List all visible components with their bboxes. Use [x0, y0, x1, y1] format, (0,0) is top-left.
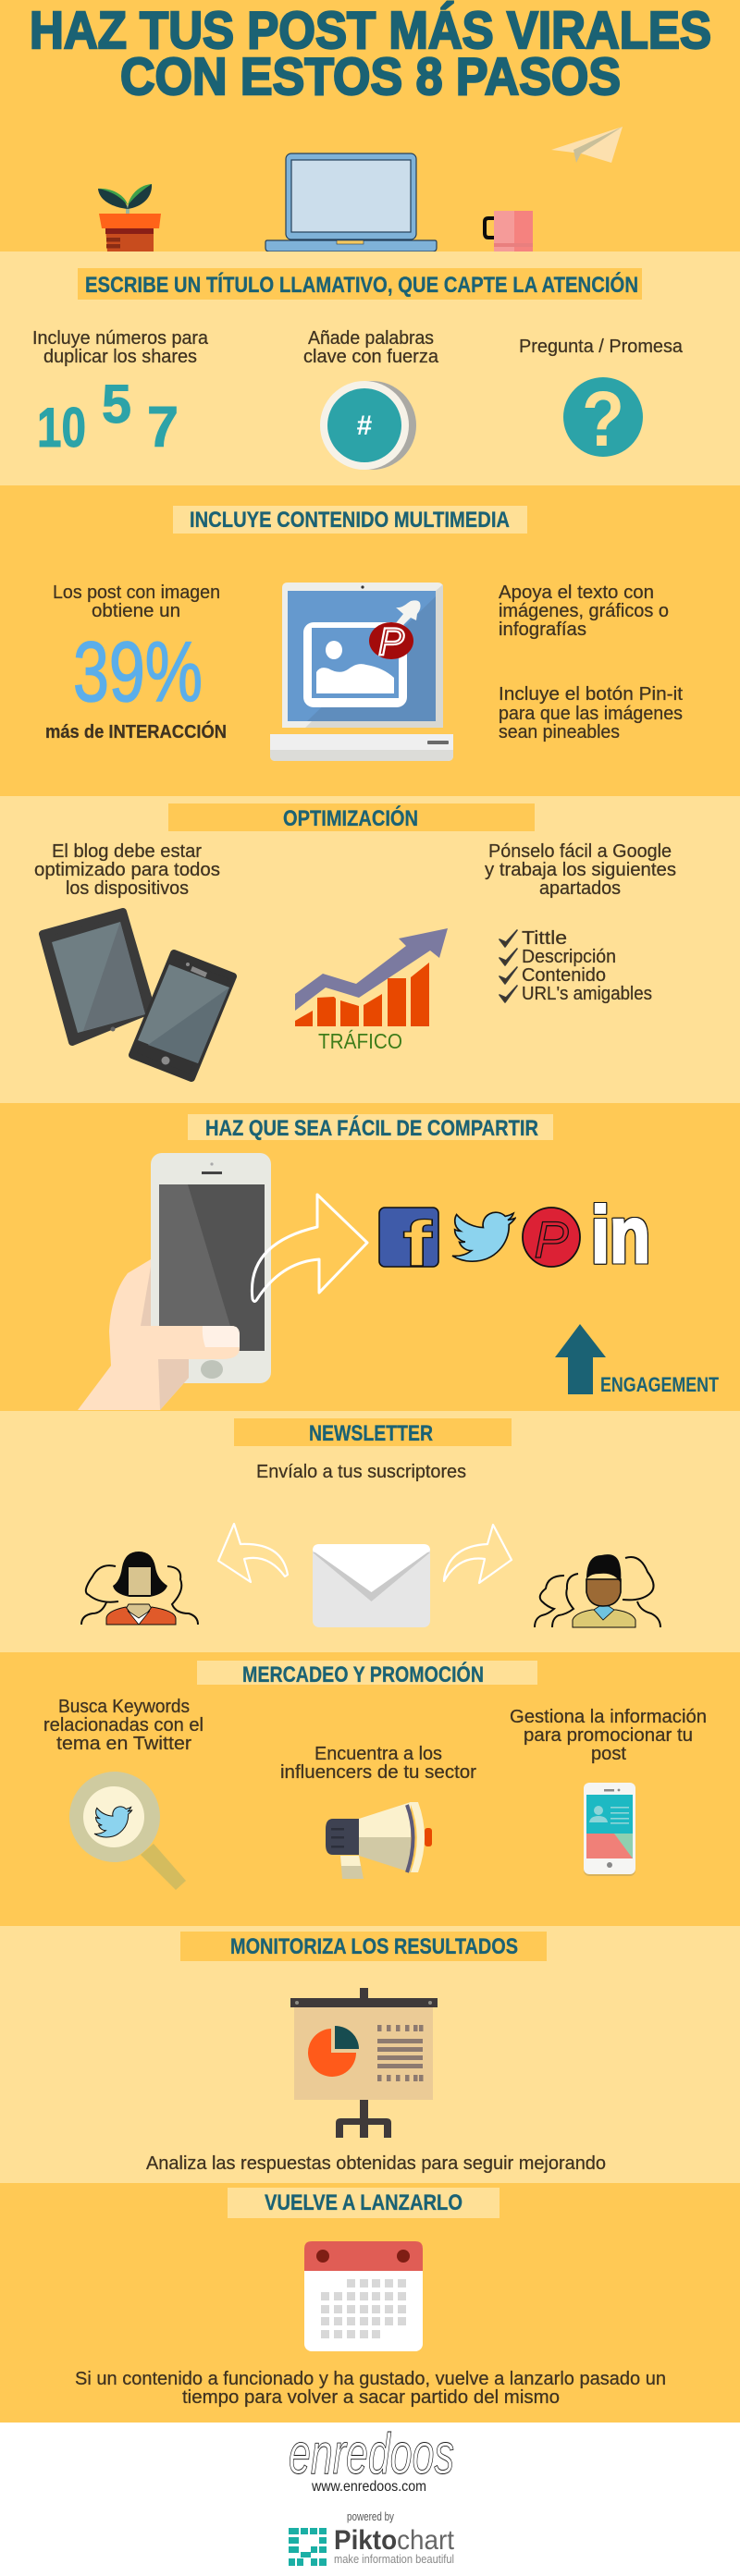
text: google: y trabaja los siguientes: [485, 860, 676, 880]
logo: piktochart: Piktochart: [334, 2525, 455, 2556]
panel: título llamativo: [0, 251, 740, 485]
checklist: Contenido: [522, 965, 606, 986]
panel: vuelve a lanzarlo: [0, 2183, 740, 2423]
text: números: duplicar los shares: [43, 347, 197, 367]
text: si un contenido: [75, 2369, 666, 2408]
icon: envelope: [313, 1544, 430, 1627]
checklist: Descripción: [522, 947, 616, 967]
icon: plant pot: [98, 184, 161, 251]
text: gestiona: Gestiona la información: [510, 1707, 707, 1727]
text: más de interacción: más de INTERACCIÓN: [45, 720, 227, 742]
icon: megaphone: [326, 1802, 432, 1879]
text: google: apartados: [539, 878, 621, 899]
text: pregunta: Pregunta / Promesa: [519, 337, 684, 357]
arrow: engagement up: [555, 1324, 606, 1394]
title: [30, 1, 711, 106]
text: analiza: Analiza las respuestas obtenidas para seguir mejorando: [146, 2153, 606, 2174]
icon: laptop with image and pin: [270, 583, 453, 761]
numbers: 10 5 7: [37, 374, 179, 460]
icon: smartphone profile: [584, 1783, 635, 1876]
icon: paper plane: [551, 127, 623, 163]
logo: enredoos: www.enredoos.com: [311, 2479, 426, 2495]
heading: MERCADEO Y PROMOCIÓN: [242, 1662, 484, 1687]
icon: presentation board: [290, 1988, 438, 2138]
text: botón pin-it: Incluye el botón Pin-it: [499, 684, 683, 705]
text: botón pin-it: [499, 684, 683, 742]
icon: twitter: [452, 1212, 515, 1261]
icon: facebook: [379, 1208, 438, 1280]
numbers: 10 5 7: 7: [147, 396, 179, 460]
heading: VUELVE A LANZARLO: [265, 2190, 462, 2215]
icon: laptop with image and pin: P: [378, 619, 404, 663]
icon: linkedin: in: [591, 1191, 650, 1280]
heading: INCLUYE CONTENIDO MULTIMEDIA: [190, 508, 510, 533]
icon: calendar: [304, 2241, 423, 2351]
panel: footer: [0, 2423, 740, 2576]
text: los post con imagen: Los post con imagen: [53, 583, 220, 603]
text: los post con imagen: obtiene un: [92, 601, 180, 621]
text: blog optimizado: El blog debe estar: [52, 841, 202, 862]
panel: mercadeo y promoción: [0, 1652, 740, 1926]
text: blog optimizado: los dispositivos: [66, 878, 189, 899]
icon: tablet and phone: [43, 912, 233, 1078]
icon: woman audience: [81, 1552, 198, 1625]
arrow: to social networks: [252, 1195, 367, 1302]
text: si un contenido: tiempo para volver a sacar partido del mismo: [182, 2387, 560, 2408]
text: botón pin-it: para que las imágenes: [499, 704, 683, 724]
icon: pinterest: [523, 1208, 580, 1269]
text: gestiona: para promocionar tu: [524, 1725, 693, 1746]
heading: [168, 803, 535, 831]
stat: 39%: 39%: [73, 625, 203, 719]
title: CON ESTOS 8 PASOS: [120, 47, 621, 106]
numbers: 10 5 7: 10: [37, 397, 86, 459]
text: si un contenido: Si un contenido a funcionado y ha gustado, vuelve a lanzarlo pasado un: [75, 2369, 666, 2389]
text: influencers: influencers de tu sector: [280, 1762, 476, 1783]
icon: question badge: [563, 375, 643, 462]
heading: NEWSLETTER: [309, 1421, 433, 1446]
panel: monitoriza: [0, 1926, 740, 2183]
text: botón pin-it: sean pineables: [499, 722, 620, 742]
text: blog optimizado: [34, 841, 220, 899]
text: blog optimizado: optimizado para todos: [34, 860, 220, 880]
logo: piktochart: powered by: [347, 2509, 394, 2523]
panel: header: [0, 0, 740, 251]
heading: HAZ QUE SEA FÁCIL DE COMPARTIR: [205, 1115, 538, 1141]
text: gestiona: [510, 1707, 707, 1764]
text: keywords: [43, 1697, 204, 1754]
icon: hand holding phone: [78, 1153, 271, 1410]
icon: hashtag badge: [320, 381, 416, 470]
heading: [180, 1932, 547, 1961]
text: google: [485, 841, 676, 899]
icon: facebook: f: [402, 1208, 433, 1280]
heading: [78, 268, 642, 300]
text: keywords: tema en Twitter: [56, 1734, 191, 1754]
panel: optimización: [0, 796, 740, 1103]
logo: enredoos: enredoos: [289, 2423, 454, 2486]
text: números: Incluye números para: [32, 328, 209, 349]
text: palabras clave: Añade palabras: [308, 328, 434, 349]
chart: tráfico: [295, 928, 448, 1053]
text: apoya el texto: Apoya el texto con: [499, 583, 654, 603]
text: apoya el texto: infografías: [499, 619, 586, 640]
logo: piktochart: [289, 2509, 455, 2566]
text: palabras clave: [303, 328, 439, 367]
icon: question badge: ?: [582, 375, 624, 462]
heading: ESCRIBE UN TÍTULO LLAMATIVO, QUE CAPTE LA ATENCIÓN: [85, 272, 638, 298]
numbers: 10 5 7: 5: [102, 374, 131, 435]
text: envíalo: Envíalo a tus suscriptores: [256, 1462, 466, 1482]
label: tráfico: TRÁFICO: [318, 1029, 402, 1053]
icon: laptop: [265, 153, 437, 251]
text: keywords: Busca Keywords: [58, 1697, 190, 1717]
icon: hashtag badge: #: [357, 411, 373, 441]
icon: man audience: [535, 1554, 660, 1627]
checklist: Tittle: [522, 928, 567, 949]
heading: [234, 1418, 512, 1446]
logo: piktochart: make information beautiful: [334, 2552, 454, 2566]
text: los post con imagen: [53, 583, 220, 621]
panel: compartir: [0, 1103, 740, 1411]
text: google: Pónselo fácil a Google: [488, 841, 672, 862]
heading: MONITORIZA LOS RESULTADOS: [230, 1934, 518, 1959]
text: apoya el texto: [499, 583, 669, 640]
text: gestiona: post: [591, 1744, 626, 1764]
panel: contenido multimedia: [0, 485, 740, 796]
checklist: [500, 928, 652, 1004]
logo: enredoos: [289, 2423, 454, 2495]
text: palabras clave: clave con fuerza: [303, 347, 439, 367]
panel: newsletter: [0, 1411, 740, 1652]
arrow: to right audience: [444, 1525, 512, 1583]
icon: pinterest: P: [534, 1210, 569, 1269]
icon: coffee mug: [485, 211, 533, 251]
icon: magnifier with twitter bird: [69, 1772, 186, 1890]
text: influencers: Encuentra a los: [314, 1744, 442, 1764]
text: apoya el texto: imágenes, gráficos o: [499, 601, 669, 621]
heading: OPTIMIZACIÓN: [283, 805, 418, 831]
text: números: [32, 328, 209, 367]
checklist: URL's amigables: [522, 984, 652, 1004]
text: keywords: relacionadas con el: [43, 1715, 204, 1736]
text: influencers: [280, 1744, 476, 1783]
arrow: to left audience: [218, 1524, 288, 1582]
